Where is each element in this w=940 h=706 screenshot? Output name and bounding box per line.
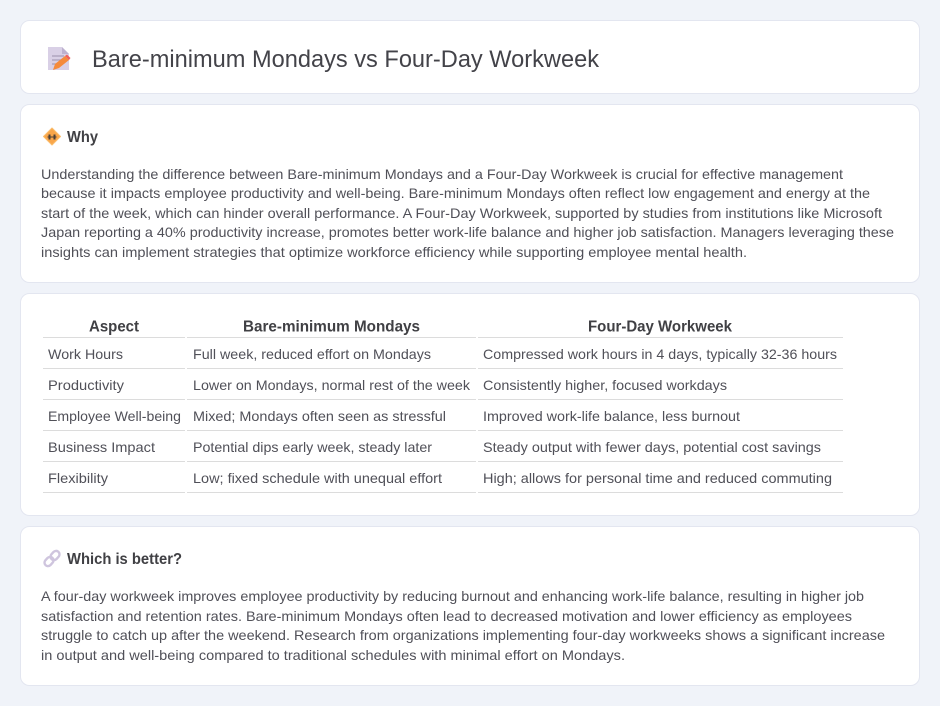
text block: why explanation (41, 166, 894, 260)
table row: productivity: Lower on Mondays, normal rest of the week (193, 377, 471, 393)
table row: work hours: Compressed work hours in 4 days, typically 32-36 hours (483, 346, 837, 362)
table row: flexibility: Low; fixed schedule with unequal effort (193, 470, 442, 486)
panel: title header (20, 20, 920, 94)
text block: why explanation: insights can implement strategies that optimize workforce efficiency while supporting employee mental health. (41, 244, 747, 260)
table row: business impact: Potential dips early week, steady later (193, 439, 432, 455)
text block: why explanation: because it impacts employee productivity and well-being. Bare-minimum Mondays often reflect low engagement and energy at the (41, 185, 870, 201)
table row: work hours: Work Hours (48, 346, 123, 362)
text block: which is better explanation: in output and well-being compared to traditional schedules with minimal effort on Mondays. (41, 647, 625, 663)
table row: flexibility: High; allows for personal time and reduced commuting (483, 470, 832, 486)
table row: business impact: Business Impact (48, 439, 155, 455)
icon: document with pencil (48, 47, 70, 70)
heading: which is better: Which is better? (67, 551, 182, 568)
table row: work hours (43, 346, 843, 368)
text block: which is better explanation: satisfaction and retention rates. Bare-minimum Mondays often lead to decreased motivation and lower efficiency as employees (41, 608, 852, 624)
table header row: Bare-minimum Mondays (243, 318, 420, 336)
table row: productivity: Consistently higher, focused workdays (483, 377, 727, 393)
table header row: Four-Day Workweek (588, 318, 732, 336)
table row: employee well-being (43, 408, 843, 430)
text block: which is better explanation: struggle to catch up after the weekend. Research from organizations implementing four-day workweeks shows a significant increase (41, 627, 885, 643)
panel: comparison table (20, 294, 920, 516)
text block: why explanation: Japan reporting a 40% productivity increase, promotes better work-life balance and higher job satisfaction. Managers leveraging these (41, 224, 894, 240)
table row: work hours: Full week, reduced effort on Mondays (193, 346, 431, 362)
icon: chain link (43, 549, 61, 568)
text block: why explanation: start of the week, which can hinder overall performance. A Four-Day Workweek, supported by studies from institutions like Microsoft (41, 205, 882, 221)
table row: flexibility: Flexibility (48, 470, 108, 486)
table row: productivity (43, 377, 843, 400)
icon: orange diamond sign (44, 128, 60, 145)
table row: employee well-being: Improved work-life balance, less burnout (483, 408, 740, 424)
table header row: Aspect (89, 318, 140, 336)
table row: business impact: Steady output with fewer days, potential cost savings (483, 439, 821, 455)
heading: why: Why (67, 129, 98, 146)
text block: which is better explanation: A four-day workweek improves employee productivity by reducing burnout and enhancing work-life balance, resulting in higher job (41, 588, 864, 604)
table row: flexibility (43, 470, 843, 492)
table row: productivity: Productivity (48, 377, 124, 393)
panel: which is better (20, 526, 920, 686)
table row: employee well-being: Employee Well-being (48, 408, 181, 424)
table header row (43, 318, 843, 338)
text block: which is better explanation (41, 588, 885, 663)
title: Bare-minimum Mondays vs Four-Day Workweek (92, 46, 600, 73)
table row: employee well-being: Mixed; Mondays often seen as stressful (193, 408, 446, 424)
panel: why (20, 104, 920, 282)
table row: business impact (43, 439, 843, 462)
text block: why explanation: Understanding the difference between Bare-minimum Mondays and a Four-Day Workweek is crucial for effective management (41, 166, 843, 182)
